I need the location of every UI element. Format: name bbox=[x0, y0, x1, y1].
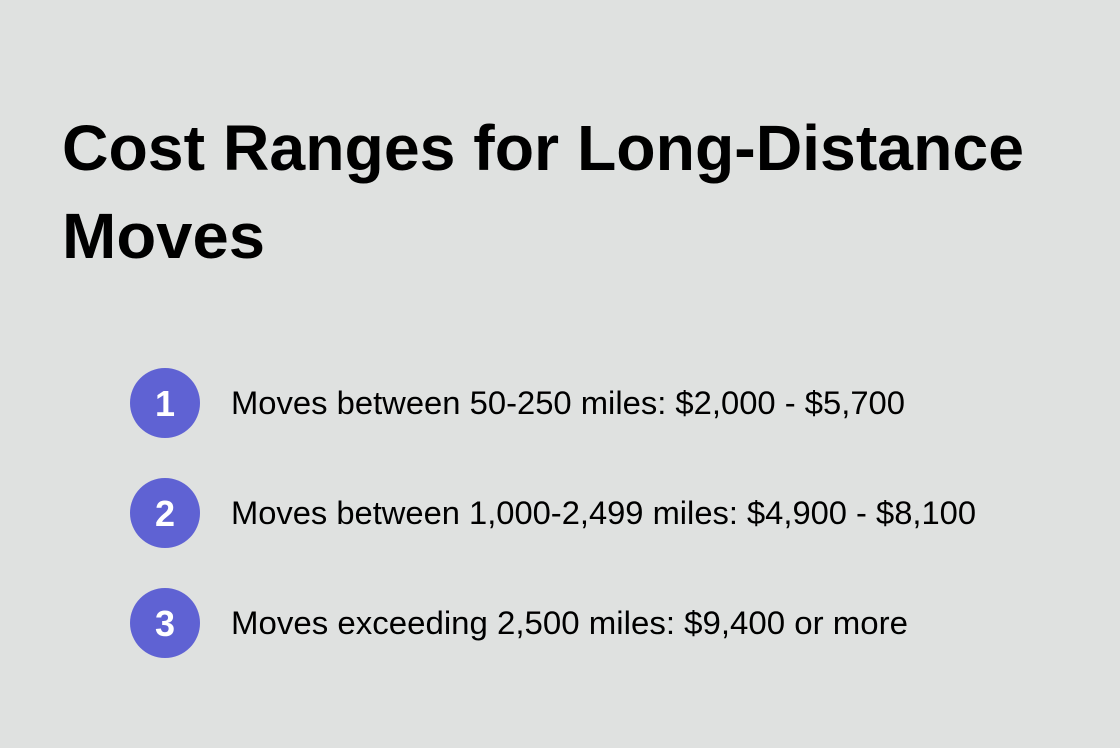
list item 2 bbox=[130, 478, 976, 548]
list item 3 bbox=[130, 588, 908, 658]
item 2 text: Moves between 1,000-2,499 miles: $4,900 - $8,100 bbox=[231, 495, 976, 531]
number badge 2: 2 bbox=[155, 493, 175, 534]
number badge 2 bbox=[130, 478, 200, 548]
item 3 text: Moves exceeding 2,500 miles: $9,400 or more bbox=[231, 605, 908, 641]
number badge 3: 3 bbox=[155, 603, 175, 644]
item 1 text: Moves between 50-250 miles: $2,000 - $5,700 bbox=[231, 385, 905, 421]
number badge 3 bbox=[130, 588, 200, 658]
title: Cost Ranges for Long-Distance bbox=[62, 112, 1024, 184]
list item 1 bbox=[130, 368, 905, 438]
number badge 1: 1 bbox=[155, 383, 175, 424]
number badge 1 bbox=[130, 368, 200, 438]
title bbox=[62, 112, 1024, 272]
title: Moves bbox=[62, 200, 265, 272]
